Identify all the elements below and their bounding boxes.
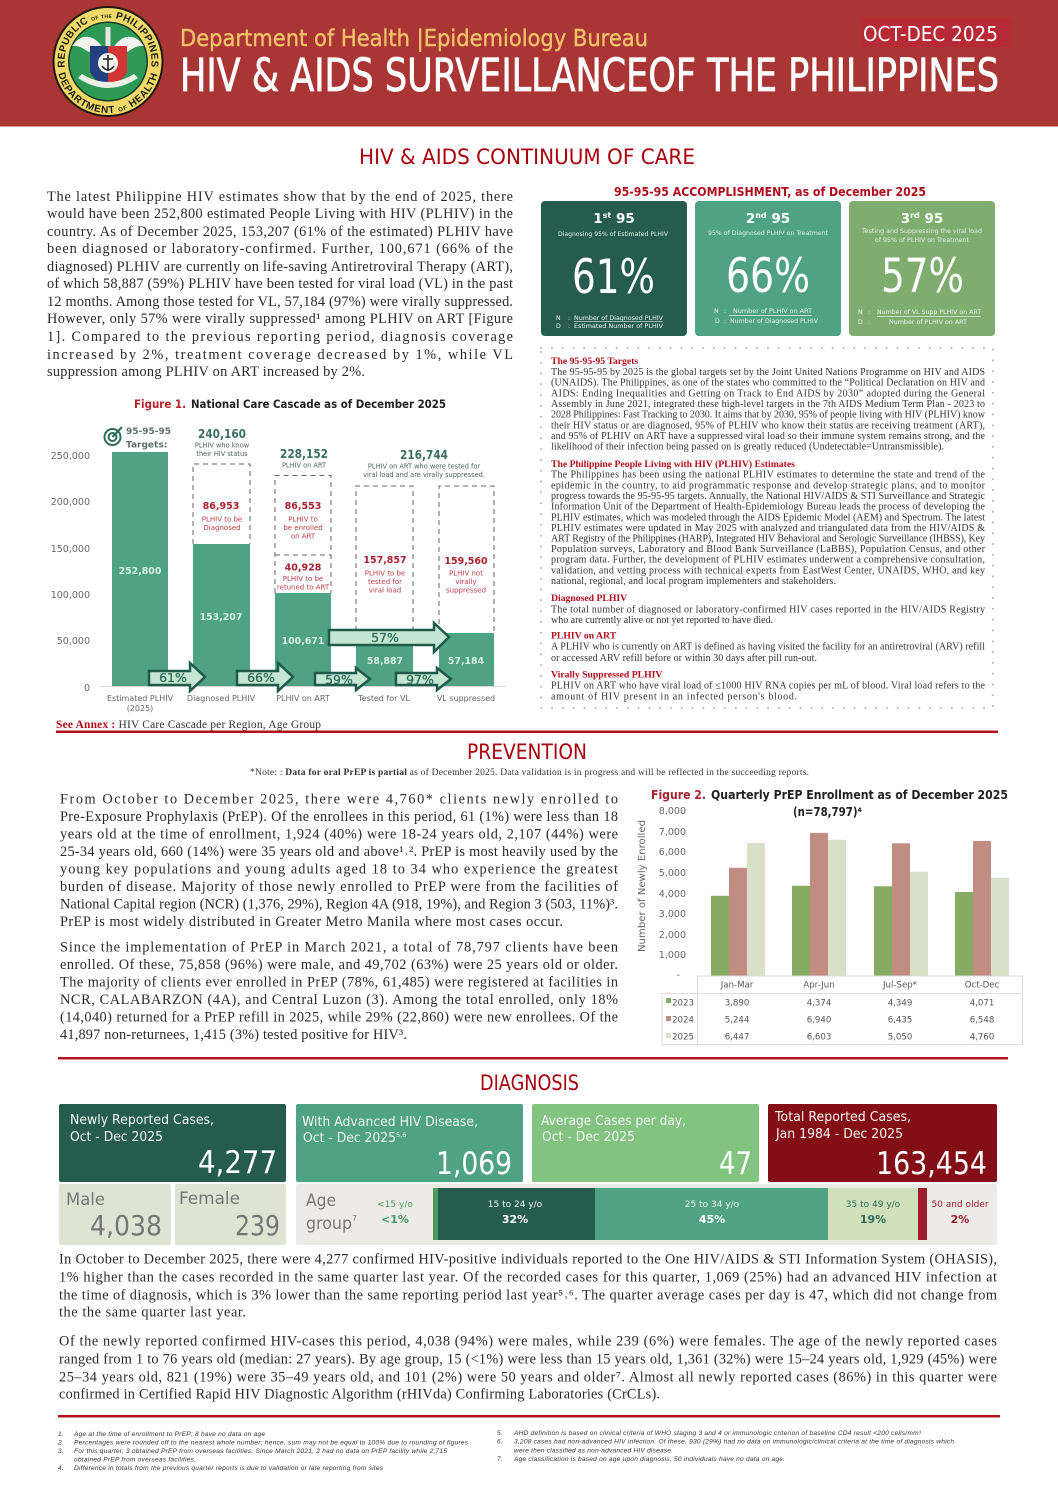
card: 3rd 95: 3: [901, 211, 910, 227]
gap: to be enrolled: [283, 501, 323, 540]
y axis: 1,000: [659, 950, 686, 961]
bar values: [119, 566, 485, 667]
data table: 2023: [672, 998, 694, 1008]
stat card: total reported cases: [768, 1104, 997, 1182]
stat card: advanced HIV disease: 1,069: [436, 1146, 512, 1182]
data table: 6,447: [725, 1032, 749, 1042]
gap: not suppressed: 159,560: [444, 556, 488, 567]
section heading: continuum of care: HIV & AIDS CONTINUUM OF CARE: [359, 145, 695, 169]
card: 1st 95: Estimated Number of PLHIV: [574, 323, 664, 330]
card: 3rd 95: Number of PLHIV on ART: [889, 319, 967, 326]
bar values: 57,184: [448, 656, 485, 667]
gap: to be diagnosed: [202, 501, 242, 532]
card: 1st 95: 1: [593, 211, 603, 227]
target: know status: 240,160: [198, 427, 246, 441]
y axis: -: [677, 970, 680, 981]
text block: prevention: burden of disease. Majority of those newly enrolled to PrEP were from the facilities of: [60, 879, 618, 895]
icon: Department of Health seal: [52, 6, 164, 117]
gap: not suppressed: PLHIV not: [449, 570, 483, 578]
text block: prevention: The majority of clients ever enrolled in PrEP (78%, 61,485) were registered at facilities in: [60, 974, 618, 990]
data table: 6,603: [807, 1032, 831, 1042]
stat card: average cases per day: Average Cases per day,: [541, 1114, 686, 1129]
text block: continuum summary: of which 58,887 (59%) PLHIV have been tested for viral load (VL) in the past: [47, 276, 513, 292]
panel: definitions: [541, 348, 993, 708]
card: 2nd 95: 66%: [726, 249, 810, 304]
definition: virally suppressed PLHIV: Virally Suppressed PLHIV: [551, 670, 662, 680]
data table: 5,244: [725, 1016, 749, 1026]
target: know status: their HIV status: [196, 450, 248, 458]
text block: diagnosis: 1% higher than the cases recorded in the same quarter last year. Of the recorded cases for this quarter, 1,069 (25%) had an advanced HIV infection at: [59, 1270, 997, 1286]
bars: [112, 452, 494, 686]
card: 2nd 95: :: [724, 318, 726, 325]
segment: 50 and older: 50 and older: [931, 1200, 989, 1210]
chart: national care cascade: 250,000: [51, 451, 90, 462]
data table: 3,890: [725, 998, 749, 1008]
gap: to be enrolled: PLHIV to: [288, 516, 318, 524]
arrow: 61%: 61%: [159, 670, 187, 685]
stat: male: Male: [66, 1190, 105, 1210]
definition: PLHIV estimates: The Philippine People Living with HIV (PLHIV) Estimates: [551, 459, 795, 470]
segment: 35 to 49: [828, 1188, 918, 1240]
card: 2nd 95: 2: [746, 211, 755, 227]
definition: the 95-95-95 targets: [551, 356, 986, 452]
text block: continuum summary: The latest Philippine HIV estimates show that by the end of 2025, there: [47, 189, 513, 205]
text block: prevention: Pre-Exposure Prophylaxis (PrEP). Of the enrollees in this period, 61 (1%) were less than 18: [60, 809, 618, 825]
y axis: 8,000: [659, 806, 686, 817]
card: 1st 95: :: [568, 315, 570, 322]
card: 1st 95: N: [556, 315, 561, 322]
segment: under 15: <15 y/o: [377, 1200, 413, 1210]
data table: 6,940: [807, 1016, 831, 1026]
card: 3rd 95: of 95% of PLHIV on Treatment: [875, 237, 970, 244]
chart title: National Care Cascade as of December 2025: [191, 397, 446, 411]
definition: PLHIV on ART: or accessed ARV refill before or within 30 days after pill run-out.: [551, 653, 817, 664]
target: suppressed: [363, 448, 485, 479]
segment: under 15: [377, 1188, 438, 1240]
chart title: Figure 2.: [651, 788, 706, 802]
gap: to be tested: 157,857: [363, 555, 407, 566]
stat card: total reported cases: 163,454: [876, 1146, 987, 1182]
text block: diagnosis: the time of diagnosis, which is 3% lower than the same reporting period last year⁵˒⁶. The quarter average cases per day is 47, which did not change from: [59, 1288, 997, 1304]
card: 2nd 95: :: [724, 308, 726, 315]
text block: prevention: enrolled. Of these, 75,858 (96%) were male, and 49,702 (63%) were 25 years old or older.: [60, 957, 618, 973]
text block: continuum summary: country. As of December 2025, 153,207 (61% of the estimated) PLHIV have: [47, 224, 513, 240]
card: 1st 95: D: [556, 323, 561, 330]
data table: 4,374: [807, 998, 831, 1008]
panel: age group bar: group: [306, 1214, 352, 1234]
text block: prevention: [60, 792, 618, 1043]
icon: Department of Health seal: REPUBLIC OF THE PHILIPPINES: [58, 12, 158, 68]
data table: 2025: [672, 1032, 694, 1042]
card: 2nd 95: nd: [755, 211, 767, 220]
chart: national care cascade: 0: [84, 683, 90, 694]
definition: the 95-95-95 targets: AIDS: Ending Inequalities and Getting on Track to End AIDS by 2030” adopted during the General: [551, 388, 985, 400]
gap: to be tested: PLHIV to be: [365, 570, 405, 578]
stat card: advanced HIV disease: With Advanced HIV Disease,: [302, 1115, 478, 1130]
data table: 4,071: [970, 998, 994, 1008]
gap: to be enrolled: on ART: [291, 532, 316, 540]
department and bureau line: Department of Health |Epidemiology Bureau: [180, 26, 648, 52]
bar values: 100,671: [282, 636, 324, 647]
definition: PLHIV estimates: ART Registry of the Philippines (HARP), Integrated HIV Behavioral and Serologic Surveillance (IHBSS), Key: [551, 534, 985, 544]
target: on ART: [280, 447, 328, 470]
definition: diagnosed PLHIV: The total number of diagnosed or laboratory-confirmed HIV cases reported in the HIV/AIDS Registry: [551, 604, 985, 616]
definition: PLHIV estimates: program data. Further, the development of PLHIV estimates underwent a comprehensive consultation,: [551, 554, 985, 566]
axis labels: [107, 694, 495, 713]
definition: the 95-95-95 targets: The 95-95-95 by 2025 is the global targets set by the Joint United Nations Programme on HIV and AIDS: [551, 367, 985, 378]
stat: female: [175, 1184, 286, 1245]
chart title: [651, 788, 1008, 819]
gap: to be returned: [277, 562, 330, 592]
footnotes: right column: 6.: [497, 1438, 503, 1446]
definition: the 95-95-95 targets: Assembly in June 2021, integrated these high-level targets in the 7th AIDS Medium Term Plan - 2023 to: [551, 399, 985, 410]
text block: prevention: 41,897 non-returnees, 1,415 (3%) tested positive for HIV³.: [60, 1027, 407, 1043]
definition: diagnosed PLHIV: Diagnosed PLHIV: [551, 593, 627, 604]
footnotes: left column: 4.: [58, 1465, 64, 1472]
card: 3rd 95: 57%: [881, 249, 964, 304]
y axis: [659, 806, 686, 981]
footnotes: left column: [57, 1431, 469, 1472]
gap: not suppressed: virally: [455, 578, 477, 586]
note on oral PrEP data: *Note: : Data for oral PrEP is partial as of December 2025. Data validation is in progress and will be reflected in the succeeding reports.: [250, 767, 809, 778]
footnotes: right column: 7.: [497, 1456, 503, 1463]
y axis: 4,000: [659, 889, 686, 900]
stat: female: 239: [235, 1209, 280, 1242]
targets label: 95-95-95: [126, 427, 171, 437]
bar values: 58,887: [367, 656, 403, 667]
bar values: 153,207: [200, 612, 242, 623]
heading: 95-95-95 accomplishment: 95-95-95 ACCOMPLISHMENT, as of December 2025: [614, 184, 926, 199]
stat: male: [59, 1184, 171, 1245]
data table: 4,349: [888, 998, 912, 1008]
card: 1st 95: 95: [611, 211, 635, 227]
footnotes: left column: 3.: [58, 1448, 64, 1455]
gap: to be returned: 40,928: [285, 562, 322, 574]
y axis title: Number of Newly Enrolled: [637, 820, 648, 952]
segment: 25 to 34: 25 to 34 y/o: [685, 1200, 740, 1210]
card: 2nd 95: 95% of Diagnosed PLHIV on Treatment: [708, 230, 829, 237]
text block: continuum summary: [47, 189, 513, 380]
footnotes: left column: 2.: [57, 1440, 64, 1446]
segment: 35 to 49: 35 to 49 y/o: [846, 1200, 901, 1210]
definition: the 95-95-95 targets: (UNAIDS). The Philippines, as one of the states who committed to the “Political Declaration on HIV and: [551, 378, 985, 388]
card: 2nd 95: N: [714, 308, 719, 315]
definition: PLHIV estimates: progress towards the 95-95-95 targets. Annually, the National HIV/AIDS & STI Surveillance and Strategic: [551, 491, 986, 502]
stat card: average cases per day: 47: [719, 1146, 752, 1182]
segment: 35 to 49: 19%: [860, 1213, 886, 1226]
segment: 50 and older: 2%: [951, 1213, 969, 1226]
axis labels: VL suppressed: [437, 694, 495, 703]
dashed gap boxes: [193, 464, 494, 633]
footnotes: left column: Percentages were rounded off to the nearest whole number; hence, sum may not be equal to 100% due to rounding of figures: [74, 1440, 469, 1446]
stat card: total reported cases: Jan 1984 - Dec 2025: [775, 1127, 903, 1142]
definition: the 95-95-95 targets: 2028 Philippines: Fast Tracking to 2030. It aims that by 2030, 95% of people living with HIV (PLHIV) know: [551, 410, 986, 420]
card: 3rd 95: [849, 201, 995, 336]
card: 2nd 95: Number of Diagnosed PLHIV: [730, 318, 819, 325]
definition: PLHIV on ART: [551, 630, 985, 664]
chart title: Quarterly PrEP Enrollment as of December 2025: [711, 788, 1008, 802]
data table: 2024: [672, 1016, 694, 1026]
text block: continuum summary: 12 months. Among those tested for VL, 57,184 (97%) were virally suppressed.: [47, 294, 513, 310]
text block: diagnosis: [59, 1252, 997, 1402]
footnotes: right column: 3,208 cases had non-advanced HIV infection. Of these, 930 (29%) had no data on immunologic/clinical criteria at the time of diagnosis which: [514, 1438, 954, 1446]
stat card: newly reported cases: Newly Reported Cases,: [70, 1113, 214, 1128]
gap: to be tested: viral load: [369, 586, 401, 594]
definition: PLHIV estimates: PLHIV estimates were updated in May 2025 with analyzed and triangulated data from the HIV/AIDS &: [551, 523, 985, 534]
definition: PLHIV estimates: Information Unit of the Department of Health-Epidemiology Bureau leads the process of developing the: [551, 502, 986, 512]
definition: PLHIV estimates: epidemic in the country, to aid programmatic response and develop strategic plans, and to monitor: [551, 480, 986, 492]
card: 2nd 95: Number of PLHIV on ART: [733, 308, 812, 315]
gap: not suppressed: suppressed: [446, 586, 486, 594]
arrow: 97%: [396, 668, 451, 690]
bar values: 252,800: [119, 566, 162, 577]
segment: 25 to 34: 45%: [699, 1213, 725, 1226]
segment: 50 and older: [918, 1188, 989, 1240]
icon: Department of Health seal: DEPARTMENT OF HEALTH: [58, 72, 158, 113]
definition: PLHIV on ART: PLHIV on ART: [551, 630, 617, 642]
target: suppressed: 216,744: [400, 448, 448, 462]
definition: PLHIV estimates: validation, and vetting process with technical experts from EastWest Center, UNAIDS, WHO, and key: [551, 566, 985, 576]
stat card: advanced HIV disease: 5,6: [396, 1131, 406, 1139]
stat card: newly reported cases: 4,277: [198, 1145, 277, 1181]
stat card: total reported cases: Total Reported Cases,: [774, 1110, 911, 1125]
data table: 4,760: [970, 1032, 994, 1042]
section heading: prevention: PREVENTION: [467, 740, 587, 764]
chart: national care cascade: 50,000: [57, 636, 90, 647]
arrow: 66%: 66%: [247, 670, 275, 685]
arrow: 59%: [315, 668, 370, 690]
arrow: 59%: 59%: [325, 672, 353, 687]
definition: the 95-95-95 targets: and 95% of PLHIV on ART have a suppressed viral load so their immune system remains strong, and the: [551, 431, 986, 442]
chart: national care cascade: 100,000: [51, 590, 90, 601]
chart: national care cascade: 150,000: [51, 544, 90, 555]
definition: virally suppressed PLHIV: amount of HIV present in an infected person's blood.: [551, 692, 797, 702]
chart title: Figure 1.: [134, 397, 186, 411]
segment: under 15: <1%: [381, 1213, 409, 1226]
text block: prevention: PrEP is most widely distributed in Greater Metro Manila where most cases occur.: [60, 914, 563, 930]
segment: 25 to 34: [595, 1188, 828, 1240]
gap: to be enrolled: be enrolled: [283, 524, 323, 532]
stat card: newly reported cases: [59, 1104, 286, 1182]
axis labels: Tested for VL: [357, 694, 410, 703]
footnotes: left column: Age at the time of enrollment to PrEP; 8 have no data on age: [73, 1431, 265, 1438]
gap: to be returned: retuned to ART: [277, 584, 330, 592]
axis labels: Estimated PLHIV: [107, 694, 174, 703]
definition: PLHIV estimates: national, regional, and local program implementers and stakeholders.: [551, 576, 836, 587]
definition: PLHIV on ART: A PLHIV who is currently on ART is defined as having visited the facility for an antiretroviral (ARV) refill: [551, 642, 985, 652]
card: 3rd 95: Number of VL Supp PLHIV on ART: [877, 309, 981, 316]
text block: prevention: years old at the time of enrollment, 1,924 (40%) were 18-24 years old, 2,107 (44%) were: [60, 826, 618, 842]
text block: diagnosis: Of the newly reported confirmed HIV-cases this period, 4,038 (94%) were males, while 239 (6%) were females. The age of the newly reported cases: [59, 1334, 997, 1350]
chart: national care cascade: 200,000: [51, 497, 90, 508]
data table: 6,548: [970, 1016, 994, 1026]
definition: PLHIV estimates: The Philippines has been using the national PLHIV estimates to determine the state and trend of the: [551, 470, 986, 480]
stat card: average cases per day: [532, 1104, 759, 1182]
data table: 5,050: [888, 1032, 912, 1042]
arrow: 57%: 57%: [371, 630, 399, 645]
text block: continuum summary: been diagnosed or laboratory-confirmed. Further, 100,671 (66% of the: [47, 241, 513, 257]
text block: prevention: National Capital region (NCR) (1,376, 29%), Region 4A (918, 19%), and Region 3 (503, 11%)³.: [60, 896, 618, 912]
section heading: diagnosis: DIAGNOSIS: [480, 1071, 579, 1095]
panel: age group bar: [296, 1184, 997, 1245]
card: 3rd 95: Testing and Suppressing the viral load: [861, 228, 982, 235]
target: on ART: PLHIV on ART: [282, 462, 327, 470]
definition: diagnosed PLHIV: [551, 593, 985, 626]
card: 3rd 95: 95: [920, 211, 943, 227]
text block: prevention: Since the implementation of PrEP in March 2021, a total of 78,797 clients have been: [60, 940, 618, 956]
definition: virally suppressed PLHIV: PLHIV on ART who have viral load of ≤1000 HIV RNA copies per mL of blood. Viral load refers to the: [551, 680, 986, 692]
card: 3rd 95: rd: [910, 211, 920, 220]
segment: 15 to 24: 32%: [502, 1213, 528, 1226]
targets label: Targets:: [126, 440, 167, 450]
card: 1st 95: st: [603, 211, 611, 220]
target: suppressed: PLHIV on ART who were tested for: [368, 462, 480, 470]
panel: age group bar: 7: [352, 1214, 357, 1223]
arrow: 66%: [237, 663, 293, 691]
gap: not suppressed: [444, 556, 488, 594]
arrow: 57%: [329, 623, 449, 652]
text block: continuum summary: diagnosed) PLHIV are currently on life-saving Antiretroviral Therapy (ART),: [47, 259, 513, 275]
footnotes: left column: 1.: [58, 1431, 64, 1438]
gap: to be tested: tested for: [368, 578, 402, 586]
text block: diagnosis: ranged from 1 to 76 years old (median: 27 years). By age group, 15 (<1%) were less than 15 years old, 1,361 (32%) were 15–24 years old, 1,929 (45%) were: [59, 1352, 997, 1368]
footnotes: right column: Age classification is based on age upon diagnosis. 50 individuals have no data on age.: [513, 1456, 785, 1463]
target: know status: PLHIV who know: [195, 442, 250, 450]
footnotes: right column: were then classified as non-advanced HIV disease.: [514, 1448, 673, 1454]
gap: to be enrolled: 86,553: [285, 501, 321, 512]
card: 2nd 95: D: [715, 318, 720, 325]
text block: continuum summary: However, only 57% were virally suppressed¹ among PLHIV on ART [Figure: [47, 311, 513, 327]
stat card: newly reported cases: Oct - Dec 2025: [70, 1130, 163, 1145]
target: know status: [195, 427, 250, 458]
card: 3rd 95: :: [868, 319, 870, 326]
segment: 15 to 24: [438, 1188, 595, 1240]
y axis: 7,000: [659, 827, 686, 838]
y axis: 5,000: [659, 868, 686, 879]
y axis: 3,000: [659, 909, 686, 920]
stat: female: Female: [179, 1189, 240, 1209]
stat card: average cases per day: Oct - Dec 2025: [542, 1130, 635, 1145]
text block: prevention: From October to December 2025, there were 4,760* clients newly enrolled to: [60, 792, 618, 808]
definition: diagnosed PLHIV: who are currently alive or not yet reported to have died.: [551, 615, 773, 626]
segment: 15 to 24: 15 to 24 y/o: [488, 1200, 543, 1210]
text block: continuum summary: 1]. Compared to the previous reporting period, diagnosis coverage: [47, 329, 513, 345]
card: 1st 95: [541, 201, 687, 336]
axis labels: (2025): [127, 704, 153, 713]
card: 1st 95: Number of Diagnosed PLHIV: [574, 315, 664, 322]
footnotes: right column: 5.: [497, 1430, 503, 1437]
stat card: advanced HIV disease: Oct - Dec 2025: [303, 1131, 396, 1146]
card: 1st 95: Diagnosing 95% of Estimated PLHIV: [558, 231, 669, 238]
definition: the 95-95-95 targets: The 95-95-95 Targets: [551, 356, 638, 367]
stat: male: 4,038: [90, 1209, 162, 1242]
card: 1st 95: 61%: [572, 250, 655, 305]
text block: continuum summary: suppression among PLHIV on ART increased by 2%.: [47, 364, 365, 380]
text block: prevention: 25-34 years old, 660 (14%) were 35 years old and above¹˒². PrEP is most heavily used by the: [60, 844, 618, 860]
footnotes: right column: [497, 1430, 954, 1463]
stat card: advanced HIV disease: [296, 1104, 523, 1182]
data table: 6,435: [888, 1016, 912, 1026]
footnotes: left column: For this quarter, 3 obtained PrEP from overseas facilities. Since March 2021, 2 had no data on PrEP facility while 2,715: [74, 1448, 447, 1455]
data table: Oct-Dec: [965, 980, 1000, 990]
definition: PLHIV estimates: Population surveys, Laboratory and Blood Bank Surveillance (LaBBS), Population Census, and other: [551, 544, 986, 555]
card: 2nd 95: 95: [767, 211, 790, 227]
text block: prevention: (14,040) returned for a PrEP refill in 2025, while 29% (22,860) were new enrollees. Of the: [60, 1010, 618, 1026]
definition: virally suppressed PLHIV: [551, 670, 986, 702]
gap: to be returned: PLHIV to be: [283, 575, 323, 583]
text block: diagnosis: confirmed in Certified Rapid HIV Diagnostic Algorithm (rHIVda) Confirming Laboratories (CrCLs).: [59, 1386, 660, 1402]
text block: continuum summary: increased by 2%, treatment coverage decreased by 1%, while VL: [47, 347, 513, 363]
text block: diagnosis: 25–34 years old, 821 (19%) were 35–49 years old, and 101 (2%) were 50 years and older⁷. Almost all newly reported cases (86%) in this quarter were: [59, 1370, 997, 1386]
arrow: 61%: [149, 663, 205, 691]
see annex note: See Annex : HIV Care Cascade per Region, Age Group: [56, 719, 321, 731]
header banner: [0, 0, 1058, 126]
target: suppressed: viral load and are virally suppressed.: [363, 471, 485, 479]
text block: diagnosis: In October to December 2025, there were 4,277 confirmed HIV-positive individuals reported to the One HIV/AIDS & STI Information System (OHASIS),: [59, 1252, 997, 1268]
gap: to be diagnosed: Diagnosed: [203, 524, 241, 532]
target: on ART: 228,152: [280, 447, 328, 461]
data table: [662, 976, 1022, 1044]
definition: the 95-95-95 targets: likelihood of their infection being passed on is greatly reduced (Undetectable=Untransmissible).: [551, 442, 944, 452]
card: 3rd 95: :: [868, 309, 870, 316]
text block: prevention: young key populations and young adults aged 18 to 34 who experience the greatest: [60, 862, 618, 878]
icon: target: [104, 427, 122, 445]
chart: national care cascade: [51, 397, 506, 713]
text block: continuum summary: would have been 252,800 estimated People Living with HIV (PLHIV) in the: [47, 206, 513, 222]
chart: quarterly PrEP enrollment: [637, 788, 1022, 1044]
chart title: (n=78,797)⁴: [793, 805, 862, 819]
gap: to be diagnosed: PLHIV to be: [202, 516, 242, 524]
definition: PLHIV estimates: [551, 459, 986, 587]
gap: to be tested: [363, 555, 407, 594]
data table: Apr-Jun: [803, 980, 835, 990]
axis labels: PLHIV on ART: [276, 694, 330, 703]
axis labels: Diagnosed PLHIV: [187, 694, 256, 703]
text block: prevention: NCR, CALABARZON (4A), and Central Luzon (3). Among the total enrolled, only 18%: [60, 992, 618, 1008]
bars: [711, 833, 1009, 976]
arrow: 97%: 97%: [406, 672, 434, 687]
card: 3rd 95: D: [858, 319, 863, 326]
data table: Jul-Sep*: [882, 980, 918, 990]
y axis: 2,000: [659, 930, 686, 941]
definition: the 95-95-95 targets: their HIV status or are diagnosed, 95% of PLHIV who know their status are receiving treatment (ART),: [551, 420, 985, 432]
card: 1st 95: :: [568, 323, 570, 330]
text block: diagnosis: the the same quarter last year.: [59, 1304, 246, 1320]
footnotes: left column: obtained PrEP from overseas facilities.: [74, 1456, 196, 1464]
gap: to be diagnosed: 86,953: [203, 501, 239, 512]
panel: age group bar: Age: [306, 1191, 336, 1211]
definition: PLHIV estimates: PLHIV estimates, which was modeled through the AIDS Epidemic Model (AEM) and Spectrum. The latest: [551, 512, 985, 524]
footnotes: right column: AHD definition is based on clinical criteria of WHO staging 3 and 4 or immunologic criterion of baseline CD4 result <200 cells/mm³: [513, 1430, 922, 1437]
footnotes: left column: Difference in totals from the previous quarter reports is due to validation or late reporting from sites: [74, 1465, 384, 1472]
data table: Jan-Mar: [720, 980, 754, 990]
card: 3rd 95: N: [858, 309, 863, 316]
y axis: 6,000: [659, 847, 686, 858]
date badge: OCT-DEC 2025: [863, 22, 998, 46]
card: 2nd 95: [695, 201, 841, 336]
